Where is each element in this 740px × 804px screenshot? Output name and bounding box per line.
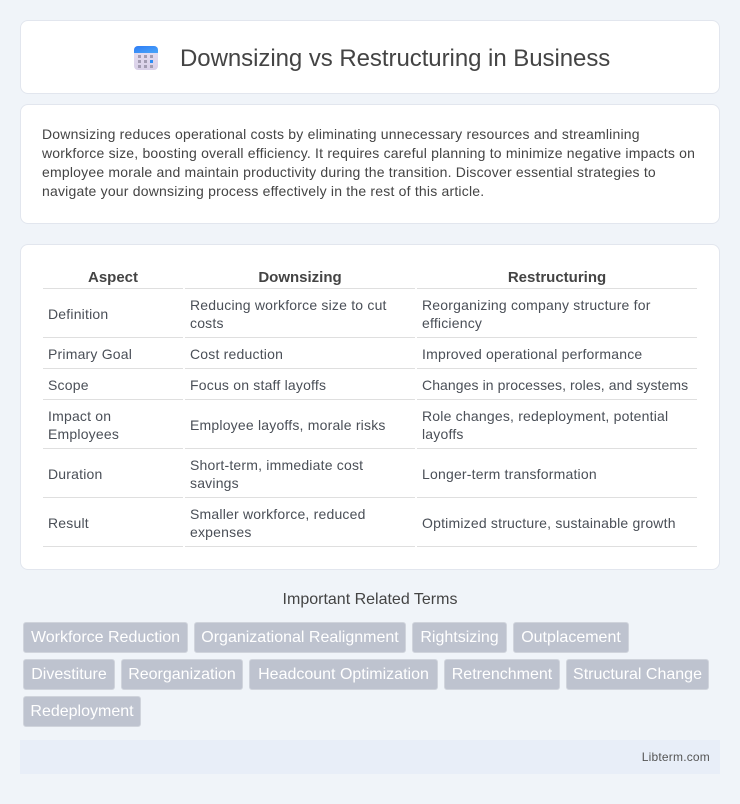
heading: related terms: Important Related Terms xyxy=(283,591,457,608)
title: Downsizing vs Restructuring in Business xyxy=(180,45,610,72)
panel: comparison table xyxy=(20,244,720,570)
table rows: Employees xyxy=(48,426,119,442)
table rows: Cost reduction xyxy=(190,346,283,362)
related terms tags: Reorganization xyxy=(128,666,236,683)
related terms tags: Workforce Reduction xyxy=(31,629,180,646)
table rows: Primary Goal xyxy=(48,346,132,362)
table rows: Changes in processes, roles, and systems xyxy=(422,377,688,393)
table header: Aspect xyxy=(88,269,138,286)
table rows: savings xyxy=(190,475,239,491)
table rows: expenses xyxy=(190,524,252,540)
table rows: Scope xyxy=(48,377,89,393)
related terms tags xyxy=(23,622,709,727)
icon: calendar xyxy=(134,46,158,70)
intro text: navigate your downsizing process effectively in the rest of this article. xyxy=(42,183,484,199)
intro text: Downsizing reduces operational costs by eliminating unnecessary resources and streamlining xyxy=(42,126,640,142)
table header: Restructuring xyxy=(508,269,606,286)
table rows: costs xyxy=(190,315,224,331)
table rows: Improved operational performance xyxy=(422,346,642,362)
related terms tags: Outplacement xyxy=(521,629,621,646)
table rows: Result xyxy=(48,515,89,531)
table rows xyxy=(43,288,697,547)
table header xyxy=(88,269,606,286)
related terms tags: Rightsizing xyxy=(420,629,499,646)
panel: introduction xyxy=(20,104,720,224)
footer credit: Libterm.com xyxy=(642,750,710,764)
related terms tags: Headcount Optimization xyxy=(258,666,429,683)
panel: header xyxy=(20,20,720,94)
table rows: layoffs xyxy=(422,426,464,442)
table rows: Longer-term transformation xyxy=(422,466,597,482)
related terms tags: Divestiture xyxy=(31,666,107,683)
related terms tags: Retrenchment xyxy=(452,666,552,683)
table rows: Duration xyxy=(48,466,103,482)
table rows: Definition xyxy=(48,306,108,322)
table rows: Reducing workforce size to cut xyxy=(190,297,387,313)
intro text: workforce size, boosting overall efficiency. It requires careful planning to minimize negative impacts on xyxy=(42,145,695,161)
table rows: Reorganizing company structure for xyxy=(422,297,651,313)
table rows: Optimized structure, sustainable growth xyxy=(422,515,676,531)
related terms tags: Redeployment xyxy=(30,703,134,720)
table rows: Role changes, redeployment, potential xyxy=(422,408,668,424)
table rows: Impact on xyxy=(48,408,111,424)
table rows: Smaller workforce, reduced xyxy=(190,506,366,522)
intro text xyxy=(42,126,695,199)
table rows: Employee layoffs, morale risks xyxy=(190,417,386,433)
footer xyxy=(20,740,720,774)
table rows: efficiency xyxy=(422,315,482,331)
related terms tags: Structural Change xyxy=(573,666,702,683)
table header: Downsizing xyxy=(258,269,342,286)
table rows: Focus on staff layoffs xyxy=(190,377,326,393)
table rows: Short-term, immediate cost xyxy=(190,457,363,473)
related terms tags: Organizational Realignment xyxy=(201,629,399,646)
intro text: employee morale and maintain productivity during the transition. Discover essential strategies to xyxy=(42,164,656,180)
